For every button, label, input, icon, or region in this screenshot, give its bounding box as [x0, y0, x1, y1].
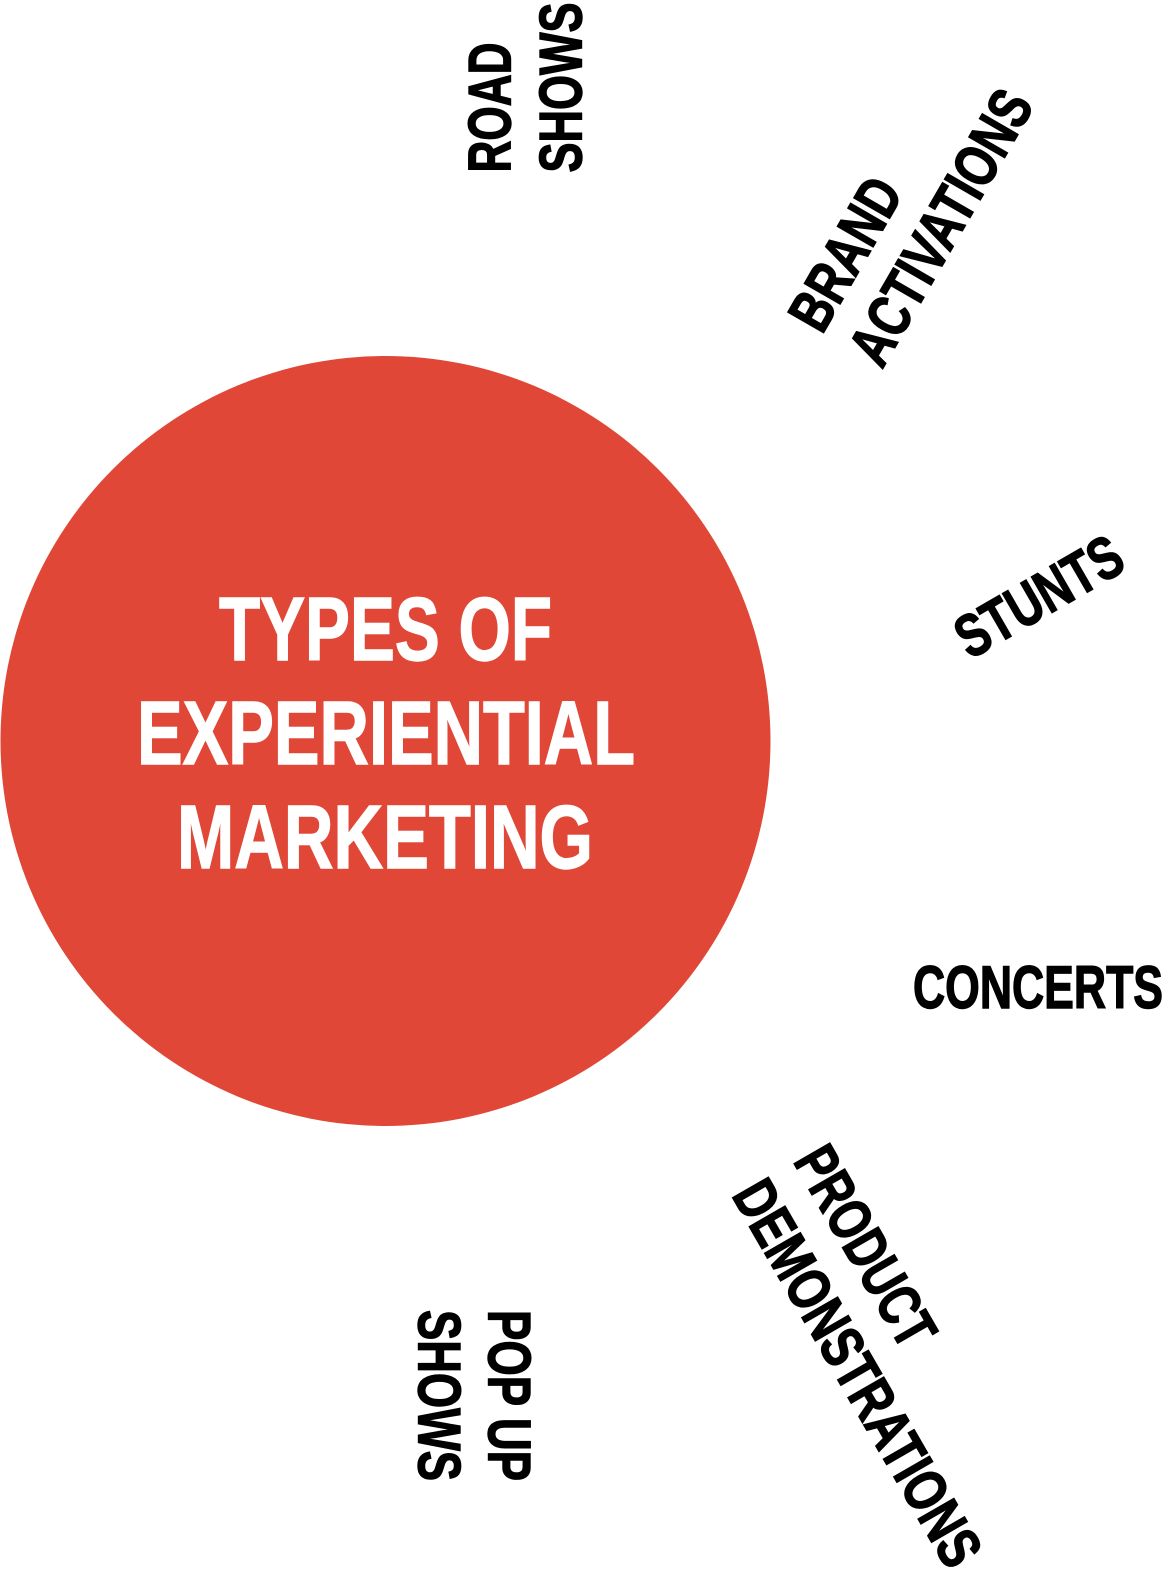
red circle [0, 356, 770, 1126]
title [137, 580, 635, 888]
label: pop up shows [406, 1310, 542, 1481]
label: pop up shows: SHOWS [406, 1310, 472, 1481]
label: road shows [456, 2, 594, 172]
label: brand activations: BRAND [775, 166, 916, 342]
title: MARKETING [177, 788, 593, 888]
label: brand activations: ACTIVATIONS [835, 78, 1046, 376]
title: TYPES OF [219, 580, 552, 680]
label: product demonstrations: PRODUCT [781, 1134, 950, 1359]
label: brand activations [775, 78, 1046, 377]
label: pop up shows: POP UP [476, 1310, 542, 1481]
label: road shows: ROAD [456, 42, 524, 172]
title: EXPERIENTIAL [137, 684, 635, 784]
central circle with title [0, 356, 770, 1126]
